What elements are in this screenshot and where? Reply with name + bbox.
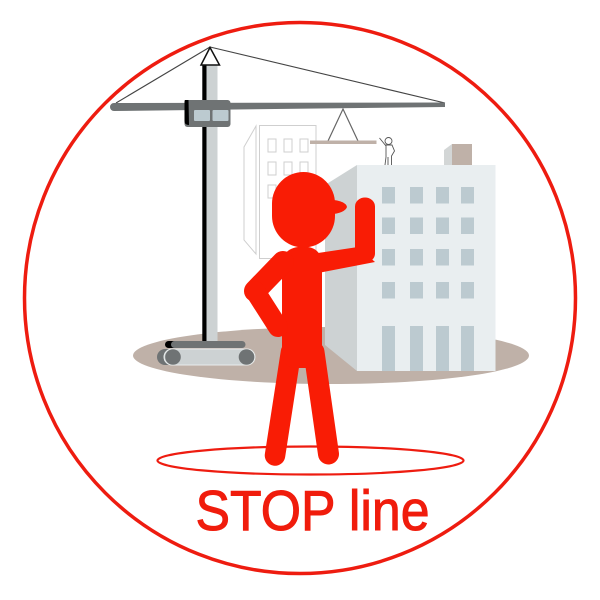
head — [272, 172, 335, 248]
torso — [282, 247, 322, 368]
building tall ground floor windows — [382, 326, 474, 371]
cap brim — [330, 200, 347, 214]
building front wall — [357, 165, 496, 371]
background building outline — [244, 126, 316, 258]
right upper arm — [318, 247, 375, 273]
raised forearm — [355, 198, 375, 262]
small worker on roof — [380, 138, 394, 165]
left forearm — [255, 291, 278, 327]
suspended load — [310, 109, 376, 144]
STOP line label: STOP line — [196, 479, 430, 543]
crane jib — [110, 102, 445, 111]
crane cables — [116, 47, 445, 103]
crane mast — [202, 62, 218, 344]
crane base — [157, 341, 255, 365]
crane cab — [184, 100, 230, 127]
left leg — [275, 352, 291, 456]
building windows — [382, 187, 474, 298]
right leg — [314, 352, 328, 454]
left upper arm — [255, 262, 283, 291]
red worker figure — [255, 172, 375, 456]
stop line ellipse — [158, 446, 464, 474]
main building — [325, 144, 496, 371]
tower crane — [110, 47, 445, 365]
ground ellipse — [133, 327, 529, 384]
crane top triangle — [201, 48, 220, 65]
chimney — [444, 144, 472, 165]
building side wall — [325, 165, 357, 371]
